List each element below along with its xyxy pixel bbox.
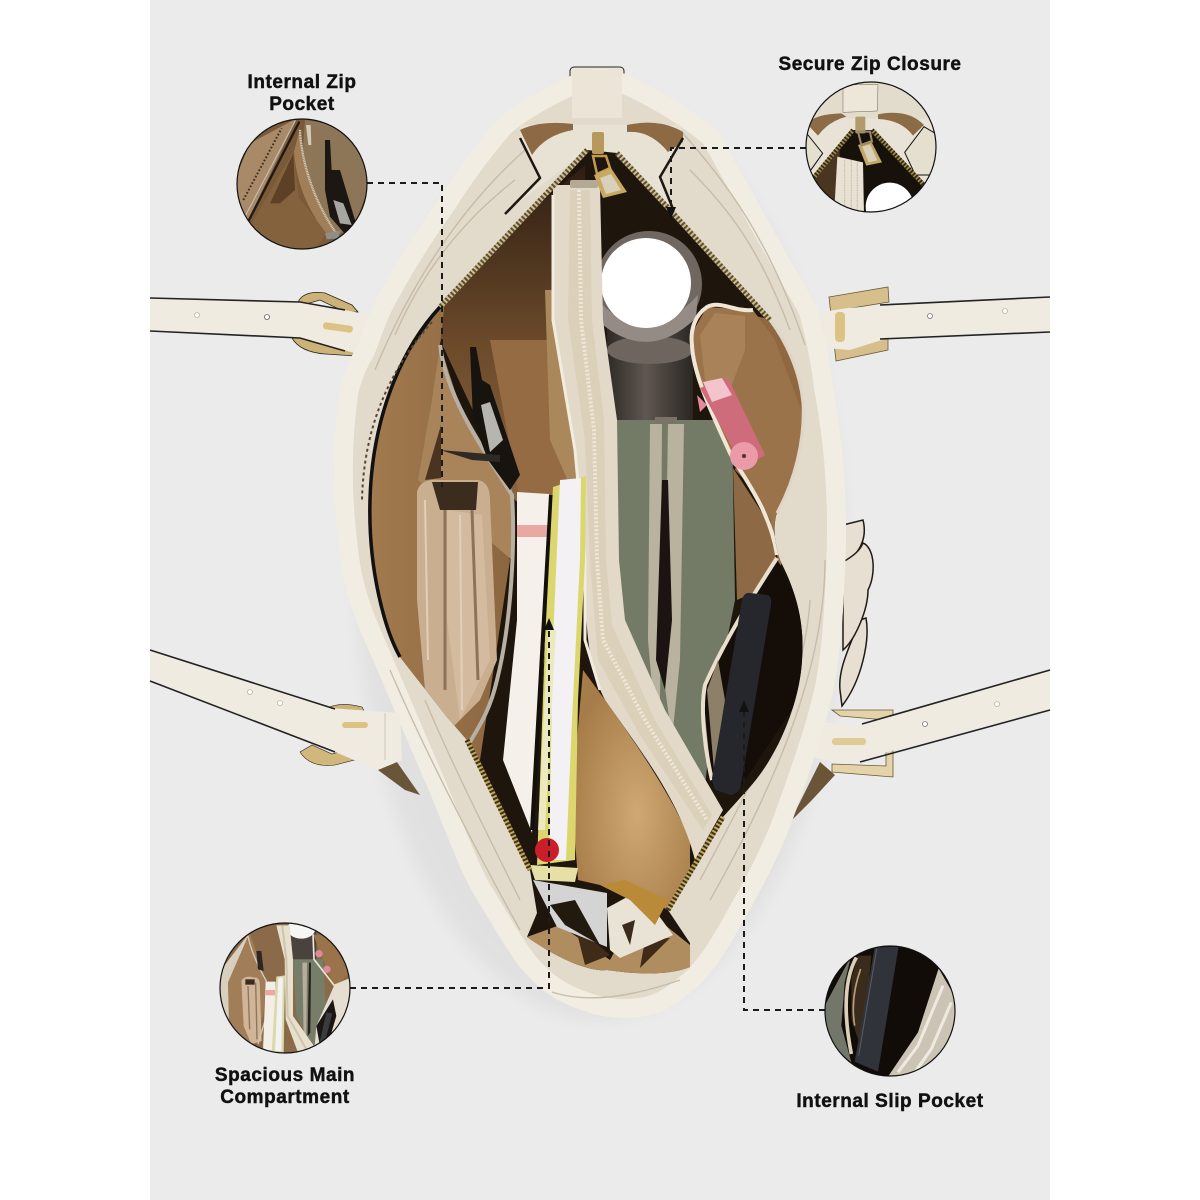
top lining (505, 123, 683, 214)
lower pocket lining (733, 468, 778, 600)
callout line and arrow: spacious main compartment (350, 618, 554, 988)
back flaps (840, 520, 873, 706)
callout line and arrow: secure zip closure (666, 148, 806, 219)
stitching (375, 130, 825, 998)
bag body (334, 69, 846, 1018)
interior (372, 150, 803, 974)
strap: top right (822, 287, 1050, 361)
zipper edges (362, 150, 803, 910)
silver zip pocket edge (440, 345, 513, 742)
right pocket (692, 305, 805, 570)
detail circle: spacious main compartment (216, 919, 356, 1056)
detail circle: internal zip pocket (233, 118, 370, 252)
phone (712, 593, 771, 795)
heading: internal zip pocket: Pocket (269, 94, 335, 115)
black mirror item (470, 347, 520, 490)
lower lining (527, 926, 690, 974)
tote bag photo (150, 67, 1050, 1018)
heading: internal slip pocket: Internal Slip Pocket (796, 1091, 984, 1112)
tan left pocket (362, 300, 510, 760)
phone pocket (703, 558, 805, 795)
callout line and arrow: internal slip pocket (739, 700, 825, 1010)
strap: top left (150, 292, 373, 356)
heading: spacious main compartment: Compartment (220, 1087, 350, 1108)
top tab (570, 67, 624, 127)
top zip pull (570, 132, 627, 198)
detail circle: secure zip closure (805, 81, 937, 213)
lining left (440, 165, 585, 502)
background panel (150, 0, 1050, 1200)
right tan lining (735, 316, 802, 478)
heading: spacious main compartment: Spacious Main (215, 1065, 355, 1086)
strap: bottom left (150, 650, 420, 795)
bottom flap (607, 898, 673, 958)
detail circle: internal slip pocket (821, 946, 961, 1079)
zipper panel (553, 185, 723, 860)
books (503, 476, 586, 882)
green pouch (612, 417, 735, 785)
strap: bottom right (790, 670, 1050, 822)
bulge (572, 670, 690, 910)
papers (533, 880, 607, 947)
bottle (596, 231, 702, 425)
heading: secure zip closure: Secure Zip Closure (778, 54, 962, 75)
bag shadow (355, 100, 845, 1020)
callout line: internal zip pocket (367, 183, 442, 487)
wallet (417, 480, 497, 728)
top tab front (572, 70, 622, 118)
pink pen (697, 378, 765, 470)
heading: internal zip pocket: Internal Zip (248, 72, 356, 93)
gold zip pull bottom (600, 880, 668, 925)
